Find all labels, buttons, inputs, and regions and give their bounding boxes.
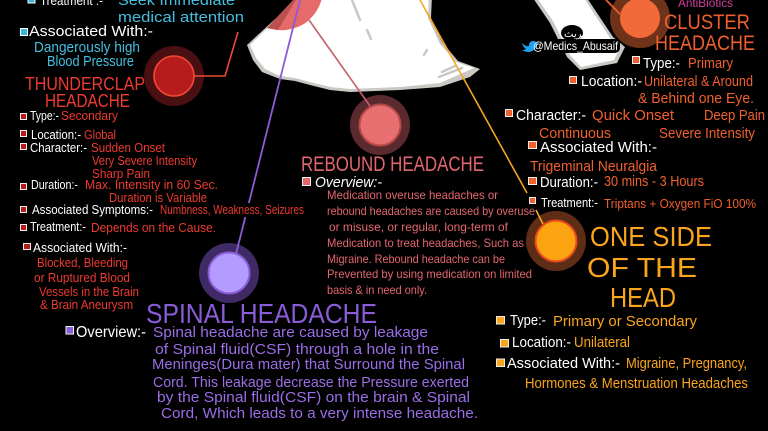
panel: cluster headache: Associated With:- bbox=[540, 139, 657, 156]
connector: thunderclap bbox=[194, 32, 238, 76]
panel: cluster headache: Continuous bbox=[539, 125, 611, 142]
heading: thunderclap bbox=[25, 74, 145, 111]
panel: thunderclap headache: & Brain Aneurysm bbox=[40, 297, 133, 312]
marker: one side bbox=[526, 211, 586, 271]
panel: cluster headache: Trigeminal Neuralgia bbox=[530, 158, 658, 175]
panel: cluster headache bbox=[506, 0, 765, 211]
panel: spinal headache: Cord. This leakage decrease the Pressure exerted bbox=[153, 374, 469, 391]
panel: one side of the head: Unilateral bbox=[574, 334, 630, 351]
panel: one side of the head: Location:- bbox=[512, 334, 571, 351]
panel: cluster headache: Location:- bbox=[581, 73, 642, 90]
panel: rebound headache: basis & in need only. bbox=[327, 283, 427, 297]
heading: one side: OF THE bbox=[587, 252, 697, 283]
panel: rebound headache: Migraine. Rebound headache can be bbox=[327, 252, 505, 266]
panel: thunderclap headache: Global bbox=[84, 127, 116, 142]
panel: spinal headache: of Spinal fluid(CSF) through a hole in the bbox=[155, 341, 439, 358]
panel: thunderclap headache: Numbness, Weakness, Seizures bbox=[160, 202, 304, 217]
panel: top-left associated: medical attention bbox=[118, 9, 244, 26]
watermark: twitter handle: بريث bbox=[564, 29, 585, 40]
panel: thunderclap headache: Sudden Onset bbox=[91, 140, 165, 155]
panel: spinal headache: by the Spinal fluid(CSF) on the brain & Spinal bbox=[157, 389, 470, 406]
panel: thunderclap headache: Blocked, Bleeding bbox=[37, 255, 128, 270]
panel: cluster headache: Character:- bbox=[516, 107, 586, 124]
panel: cluster headache: Type:- bbox=[643, 55, 680, 72]
panel: spinal headache: Cord, Which leads to a very intense headache. bbox=[161, 405, 478, 422]
panel: one side of the head: Type:- bbox=[510, 312, 546, 329]
marker: spinal bbox=[199, 243, 259, 303]
panel: cluster headache: Triptans + Oxygen FiO 100% bbox=[604, 196, 756, 211]
icon: twitter bird bbox=[522, 41, 538, 52]
marker: thunderclap bbox=[144, 46, 204, 106]
panel: rebound headache: or misuse, or regular, long-term of bbox=[329, 220, 509, 234]
panel: thunderclap headache: Max. Intensity in 60 Sec. bbox=[85, 177, 218, 192]
heading: thunderclap: HEADACHE bbox=[45, 91, 130, 111]
panel: cluster headache: Quick Onset bbox=[592, 107, 675, 124]
panel: top-left associated: Blood Pressure bbox=[47, 53, 134, 70]
panel: rebound headache: Prevented by using medication on limited bbox=[327, 267, 532, 281]
heading: one side bbox=[587, 221, 712, 313]
panel: rebound headache: Medication to treat headaches, Such as bbox=[327, 236, 524, 250]
marker: cluster bbox=[610, 0, 670, 48]
panel: top-left associated: Dangerously high bbox=[34, 39, 140, 56]
panel: one side of the head: Migraine, Pregnancy, bbox=[626, 355, 747, 372]
panel: rebound headache bbox=[301, 153, 535, 297]
panel: one side of the head: Primary or Secondary bbox=[553, 313, 697, 330]
panel: thunderclap headache: Sharp Pain bbox=[92, 166, 150, 181]
panel: cluster headache: & Behind one Eye. bbox=[638, 90, 754, 107]
panel: thunderclap headache bbox=[20, 74, 307, 312]
panel: thunderclap headache: Vessels in the Brain bbox=[39, 284, 139, 299]
panel: one side of the head bbox=[496, 221, 748, 392]
panel: thunderclap headache: Associated With:- bbox=[33, 240, 127, 255]
heading: one side: HEAD bbox=[610, 282, 676, 313]
panel: thunderclap headache: Character:- bbox=[30, 140, 87, 155]
heading: rebound: REBOUND HEADACHE bbox=[301, 153, 484, 176]
panel: cluster headache: Duration:- bbox=[540, 174, 598, 191]
marker: rebound bbox=[350, 95, 410, 155]
panel: thunderclap headache: Location:- bbox=[31, 127, 81, 142]
heading: cluster: CLUSTER bbox=[664, 11, 750, 34]
heading: spinal: SPINAL HEADACHE bbox=[146, 298, 377, 329]
panel: cluster headache: 30 mins - 3 Hours bbox=[604, 173, 704, 190]
panel: rebound headache: Overview:- bbox=[315, 174, 382, 191]
panel: thunderclap headache: Type:- bbox=[30, 108, 59, 123]
watermark: twitter handle bbox=[522, 25, 620, 53]
panel: thunderclap headache: Secondary bbox=[61, 108, 118, 123]
panel: spinal headache: Spinal headache are caused by leakage bbox=[153, 324, 428, 341]
panel: thunderclap headache: Treatment:- bbox=[30, 219, 86, 234]
panel: thunderclap headache: Duration is Variable bbox=[109, 190, 207, 205]
connector: spinal bbox=[236, 0, 300, 254]
panel: cluster headache: Treatment:- bbox=[541, 195, 598, 210]
connector: one side bbox=[420, 0, 543, 224]
panel: rebound headache: Medication overuse headaches or bbox=[327, 188, 498, 202]
heading: one side: ONE SIDE bbox=[590, 221, 712, 252]
connector: rebound bbox=[309, 20, 370, 106]
illustration: head silhouette bbox=[247, 0, 625, 92]
panel: cluster headache: Severe Intensity bbox=[659, 125, 755, 142]
panel: spinal headache bbox=[66, 298, 478, 422]
heading: thunderclap: THUNDERCLAP bbox=[25, 74, 145, 94]
panel: thunderclap headache: Duration:- bbox=[31, 177, 78, 192]
watermark: twitter handle: @Medics_Abusaif bbox=[533, 39, 619, 53]
heading: cluster bbox=[655, 11, 755, 55]
panel: thunderclap headache: Very Severe Intensity bbox=[92, 153, 197, 168]
panel: rebound headache: rebound headaches are caused by overuse bbox=[327, 204, 535, 218]
panel: top-left associated bbox=[20, 0, 244, 70]
panel: spinal headache: Meninges(Dura mater) that Surround the Spinal bbox=[152, 356, 465, 373]
panel: spinal headache: Overview:- bbox=[76, 324, 146, 341]
panel: thunderclap headache: or Ruptured Blood bbox=[34, 270, 130, 285]
panel: top-left associated: Associated With:- bbox=[29, 23, 153, 40]
connector: cluster bbox=[606, 0, 620, 14]
panel: cluster headache: Primary bbox=[688, 55, 733, 72]
panel: one side of the head: Associated With:- bbox=[507, 355, 620, 372]
panel: thunderclap headache: Depends on the Cause. bbox=[91, 220, 216, 235]
panel: thunderclap headache: Associated Symptoms:- bbox=[32, 202, 153, 217]
